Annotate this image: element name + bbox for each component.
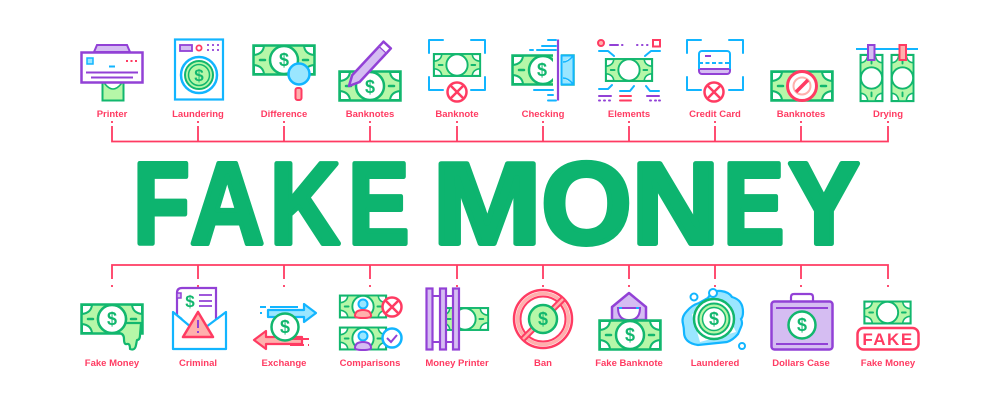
- bottom connector: [112, 265, 888, 287]
- icon: credit card rejected: [687, 40, 743, 102]
- title: A: [190, 140, 264, 269]
- icon: melting banknote: [82, 304, 142, 350]
- icon: dollars case: $: [797, 315, 807, 335]
- icon: exchange arrows: $: [280, 317, 290, 337]
- label: Banknotes: Banknotes: [777, 109, 825, 120]
- icon: dollars case: [772, 294, 832, 350]
- label: Laundering: Laundering: [172, 109, 224, 120]
- label: Comparisons: Comparisons: [340, 358, 400, 369]
- label: Dollars Case: Dollars Case: [772, 358, 830, 369]
- icon: banned banknote: [772, 72, 832, 100]
- icon: difference magnifier: [254, 46, 314, 100]
- title: E: [348, 139, 409, 269]
- label: Criminal: Criminal: [179, 358, 217, 369]
- icon: printer: [82, 45, 142, 100]
- icon: laundered coin: $: [709, 309, 719, 329]
- icon: drying banknotes: [856, 45, 918, 101]
- icon: checking banknote: $: [537, 60, 547, 80]
- label: Difference: Difference: [261, 109, 307, 120]
- icon: exchange arrows: [254, 304, 316, 349]
- label: Credit Card: Credit Card: [689, 109, 741, 120]
- label: Banknote: Banknote: [435, 109, 479, 120]
- title: M: [433, 139, 542, 269]
- icon: fake banknote sign: [858, 301, 918, 350]
- icon: washing machine: $: [194, 66, 204, 85]
- icon: difference magnifier: $: [279, 50, 289, 70]
- label: Money Printer: Money Printer: [425, 358, 489, 369]
- icon: banknote and pencil: [340, 42, 400, 100]
- label: Fake Banknote: Fake Banknote: [595, 358, 663, 369]
- icon: scanned banknote rejected: [429, 40, 485, 102]
- icon: ban: [514, 290, 572, 348]
- label: Banknotes: Banknotes: [346, 109, 394, 120]
- icon: criminal envelope: $: [185, 292, 195, 311]
- title: N: [632, 140, 719, 269]
- icon: fake banknote sign: FAKE: [862, 330, 914, 349]
- icon: ban: $: [538, 309, 548, 329]
- title: Y: [788, 138, 860, 268]
- label: Fake Money: Fake Money: [85, 358, 140, 369]
- icon: checking banknote: [512, 40, 574, 100]
- icon: banknote and pencil: $: [365, 77, 375, 97]
- label: Drying: Drying: [873, 109, 903, 120]
- top connector: [112, 121, 888, 142]
- title: [133, 138, 860, 269]
- label: Ban: Ban: [534, 358, 552, 369]
- icon: fake banknote thief: $: [625, 325, 635, 345]
- label: Fake Money: Fake Money: [861, 358, 916, 369]
- title: F: [133, 139, 190, 269]
- icon: melting banknote: $: [107, 309, 117, 329]
- icon: fake banknote thief: [600, 293, 660, 350]
- label: Laundered: Laundered: [691, 358, 739, 369]
- label: Exchange: Exchange: [262, 358, 306, 369]
- label: Checking: Checking: [522, 109, 565, 120]
- label: Elements: Elements: [608, 109, 650, 120]
- icon: laundered coin: [682, 289, 745, 349]
- label: Printer: Printer: [97, 109, 128, 120]
- icon: money printer: [426, 288, 488, 350]
- title: K: [270, 138, 340, 268]
- icon: comparison banknotes: [340, 295, 402, 350]
- icon: criminal envelope: [173, 288, 226, 349]
- icon: washing machine: [175, 40, 223, 100]
- icon: banknote elements: [598, 40, 660, 100]
- title: O: [541, 138, 632, 268]
- title: E: [723, 139, 784, 269]
